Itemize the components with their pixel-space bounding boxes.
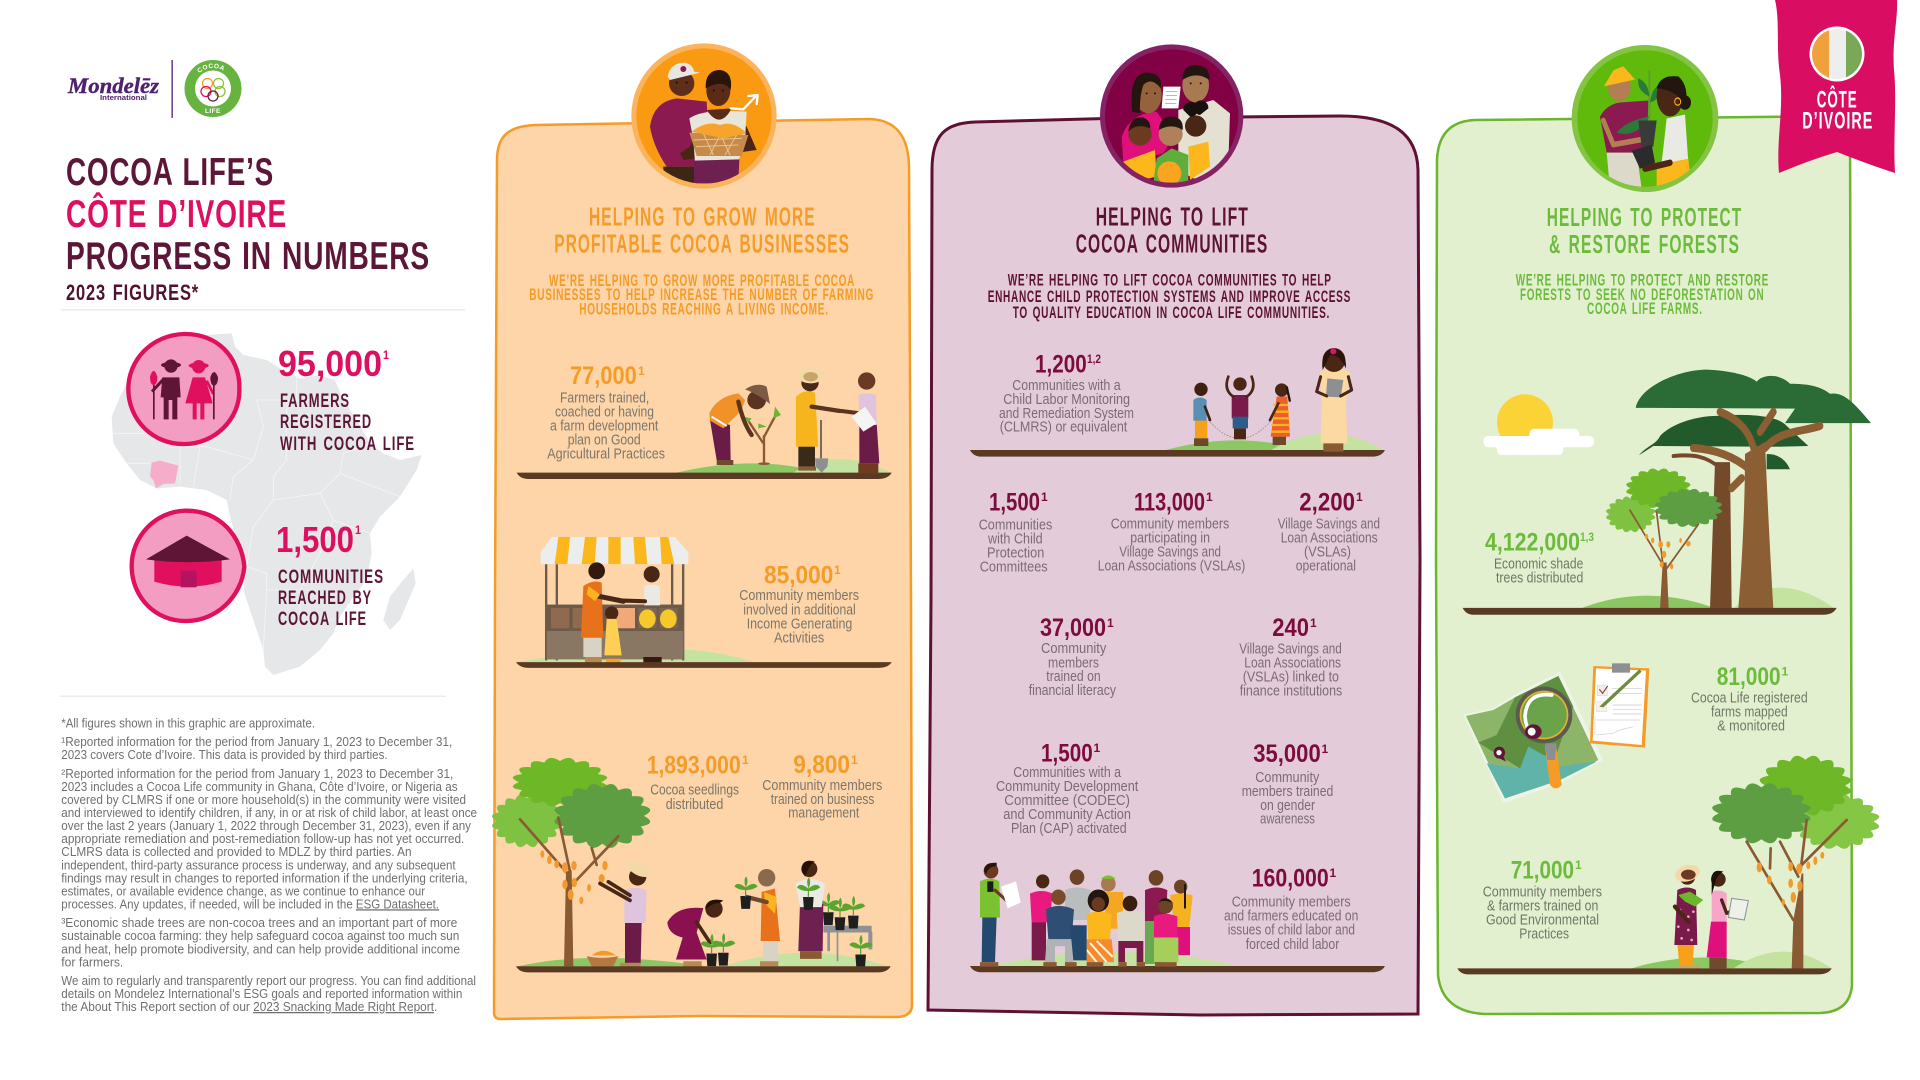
stat: 9,800 — [762, 751, 882, 822]
stat: 240: Village Savings and — [1239, 642, 1342, 658]
stat: 77,000: a farm development — [550, 419, 658, 435]
stat: 1,500 CODEC: 1,500 — [1041, 739, 1093, 767]
footnotes: estimates, or available evidence change, as we continue to enhance our — [61, 883, 426, 898]
stat: 1,500 CODEC: Committee (CODEC) — [1004, 793, 1130, 809]
stat: 113,000: Loan Associations (VSLAs) — [1098, 558, 1245, 574]
footnotes: the About This Report section of our 2023 Snacking Made Right Report. — [61, 999, 437, 1014]
heading: HELPING TO PROTECT — [1547, 204, 1742, 232]
footnotes: over the last 2 years (January 1, 2022 through December 31, 2023), even if any — [61, 818, 472, 833]
stat: 37,000: members — [1048, 655, 1099, 671]
stat: 71,000: Good Environmental — [1486, 913, 1599, 929]
stat: 2,200: 1 — [1356, 490, 1363, 504]
logo: Mondelez wordmark: International — [100, 95, 147, 102]
footnotes — [61, 715, 477, 1014]
logo: Cocoa Life badge: LIFE — [205, 108, 221, 115]
heading: COCOA COMMUNITIES — [1076, 231, 1268, 259]
stat: 1,500 child protection committees — [979, 488, 1052, 575]
stat: 9,800: 9,800 — [793, 751, 850, 779]
stat: 1,200: 1,200 — [1035, 350, 1087, 378]
stat: 2,200: (VSLAs) — [1304, 544, 1351, 560]
stat: 81,000: farms mapped — [1711, 705, 1788, 721]
heading: HELPING TO GROW MORE — [589, 204, 816, 232]
stat: 35,000: 35,000 — [1253, 740, 1321, 768]
icon: male farmer — [150, 359, 181, 419]
title: PROGRESS IN NUMBERS — [66, 235, 430, 278]
stat: 77,000: 77,000 — [570, 362, 637, 390]
illustration: market stall — [516, 537, 892, 668]
stat: 240: (VSLAs) linked to — [1243, 669, 1339, 685]
stat: 160,000: issues of child labor and — [1228, 923, 1355, 939]
stat: 77,000: coached or having — [555, 405, 654, 421]
stat: 1,200: 1,2 — [1087, 352, 1101, 366]
stat: 1,500 CODEC: 1 — [1094, 741, 1100, 755]
footnotes: findings may result in changes to reported information if the underlying criteria, — [61, 870, 468, 885]
title: CÔTE D’IVOIRE — [66, 191, 287, 236]
stat: 95,000 farmers: REGISTERED — [280, 412, 372, 433]
stat: 113,000: Village Savings and — [1119, 544, 1221, 560]
stat: 160,000: Community members — [1232, 895, 1351, 911]
panel: protect and restore forests — [1436, 45, 1879, 1014]
stat: 81,000 — [1691, 663, 1808, 735]
stat: 37,000: 37,000 — [1040, 614, 1106, 642]
intro text: HOUSEHOLDS REACHING A LIVING INCOME. — [579, 300, 829, 318]
stat: 37,000: financial literacy — [1029, 683, 1117, 699]
stat: 1,500 child protection committees: Protection — [987, 545, 1044, 561]
stat: 71,000: 71,000 — [1511, 856, 1574, 884]
stat: 1,893,000: Cocoa seedlings — [650, 783, 739, 799]
stat: 9,800: trained on business — [771, 792, 874, 808]
stat: 240: 1 — [1310, 616, 1317, 630]
footnotes: *All figures shown in this graphic are approximate. — [61, 715, 315, 730]
stat: 95,000 farmers: WITH COCOA LIFE — [280, 434, 415, 455]
stat: 1,200: (CLMRS) or equivalent — [1000, 420, 1127, 436]
stat: 4,122,000: trees distributed — [1496, 571, 1583, 587]
stat: 81,000: 1 — [1782, 664, 1788, 678]
stat: 160,000: 1 — [1330, 866, 1336, 880]
stat: 2,200: Loan Associations — [1281, 531, 1378, 547]
magnifier — [1516, 687, 1572, 788]
stat: 160,000: forced child labor — [1246, 937, 1339, 953]
heading — [1076, 204, 1268, 259]
intro text: BUSINESSES TO HELP INCREASE THE NUMBER OF FARMING — [529, 286, 874, 304]
map: Africa — [112, 333, 422, 675]
stat: 113,000: participating in — [1130, 531, 1210, 547]
stat: 1,500 child protection committees: 1 — [1041, 490, 1048, 504]
heading — [554, 204, 850, 259]
intro text: WE’RE HELPING TO GROW MORE PROFITABLE COCOA — [549, 272, 855, 290]
footnotes: covered by CLMRS if one or more household(s) in the community were visited — [61, 792, 466, 807]
stat: 4,122,000: 4,122,000 — [1485, 528, 1580, 556]
stat: 85,000: Income Generating — [747, 617, 852, 633]
footnotes: ¹Reported information for the period from January 1, 2023 to December 31, — [61, 734, 452, 749]
footnotes: independent, third-party assurance process is underway, and any subsequent — [61, 857, 456, 872]
stat: 71,000 — [1483, 856, 1602, 942]
panel background: orange — [494, 119, 912, 1019]
stat: 9,800: Community members — [762, 778, 882, 794]
stat: 35,000: members trained — [1242, 784, 1333, 800]
stat: 85,000: Activities — [774, 630, 824, 646]
logo: Mondelez wordmark: Mondelēz — [67, 73, 159, 98]
stat: 240: 240 — [1272, 614, 1309, 642]
intro text: TO QUALITY EDUCATION IN COCOA LIFE COMMUNITIES. — [1013, 304, 1330, 322]
icon: house badge — [132, 511, 244, 621]
intro text — [1516, 271, 1769, 318]
title: 2023 FIGURES* — [66, 280, 199, 305]
illustration: two women and cocoa tree — [1457, 756, 1879, 974]
footnotes: and heat, help promote biodiversity, and can help provide additional income — [61, 941, 460, 956]
stat: 95,000 farmers: 95,000 — [278, 343, 382, 384]
stat: 9,800: 1 — [851, 753, 858, 767]
footnotes: processes. Any updates, if needed, will be included in the ESG Datasheet. — [61, 896, 439, 911]
stat: 1,500 CODEC: and Community Action — [1003, 807, 1131, 823]
heading: PROFITABLE COCOA BUSINESSES — [554, 231, 850, 259]
stat: 35,000: Community — [1255, 770, 1320, 786]
panel background: green — [1436, 116, 1852, 1014]
clipboard — [1590, 663, 1649, 748]
banner: Côte d'Ivoire ribbon: CÔTE — [1817, 86, 1858, 114]
stat: 77,000: 1 — [638, 364, 645, 378]
stat: 2,200: operational — [1296, 558, 1356, 574]
stat: 1,200: and Remediation System — [999, 406, 1134, 422]
intro text — [529, 272, 874, 318]
icon: family — [1100, 44, 1243, 188]
stat: 37,000: 1 — [1107, 616, 1114, 630]
stat: 113,000: Community members — [1111, 517, 1229, 533]
stat: 77,000 — [547, 362, 665, 463]
stat: 71,000: & farmers trained on — [1487, 899, 1598, 915]
stat: 1,200 — [999, 350, 1134, 436]
stat: 35,000: awareness — [1260, 812, 1315, 828]
intro text: ENHANCE CHILD PROTECTION SYSTEMS AND IMPROVE ACCESS — [988, 288, 1351, 306]
stat: 1,893,000: 1,893,000 — [647, 752, 741, 780]
intro text: FORESTS TO SEEK NO DEFORESTATION ON — [1520, 286, 1764, 304]
illustration: baobab and cocoa trees — [1463, 370, 1871, 615]
footnotes: ²Reported information for the period from January 1, 2023 to December 31, — [61, 766, 453, 781]
panel background: purple — [928, 116, 1420, 1015]
stat: 240: Loan Associations — [1244, 655, 1341, 671]
icon: farmers badge — [128, 334, 239, 444]
footnotes: appropriate remediation and post-remediation follow-up has not yet occurred. — [61, 831, 464, 846]
stat: 1,200: Child Labor Monitoring — [1003, 392, 1130, 408]
stat: 71,000: Practices — [1519, 926, 1569, 942]
illustration: sun and cloud — [1483, 394, 1594, 455]
stat: 85,000 — [739, 561, 859, 646]
footnotes: CLMRS data is collected and provided to MDLZ by third parties. An — [61, 844, 412, 859]
intro text: WE’RE HELPING TO LIFT COCOA COMMUNITIES TO HELP — [1008, 272, 1332, 290]
stat: 1,500 CODEC: Community Development — [996, 779, 1138, 795]
logo: Cocoa Life badge: COCOA — [198, 64, 224, 72]
illustration: cocoa tree and seedlings — [492, 758, 891, 972]
footnotes: We aim to regularly and transparently report our progress. You can find additional — [61, 973, 476, 988]
heading — [1547, 204, 1742, 259]
stat: 9,800: management — [788, 806, 859, 822]
panel: profitable cocoa businesses — [492, 43, 912, 1019]
stat: 1,500 communities: COCOA LIFE — [278, 609, 367, 630]
map — [1463, 672, 1603, 803]
stat: 85,000: 1 — [834, 563, 841, 577]
stat: 95,000 farmers — [278, 343, 415, 455]
stat: 77,000: Agricultural Practices — [547, 447, 665, 463]
stat: 81,000: & monitored — [1717, 719, 1785, 735]
stat: 95,000 farmers: 1 — [383, 348, 389, 362]
illustration: farmers planting and shaking hands — [517, 369, 892, 479]
stat: 37,000: trained on — [1046, 669, 1101, 685]
heading: & RESTORE FORESTS — [1549, 231, 1740, 259]
footnotes: and interviewed to identify children, if any, in or at risk of child labor, at least once — [61, 805, 477, 820]
stat: 240: finance institutions — [1240, 683, 1342, 699]
stat: 35,000 — [1242, 740, 1333, 828]
stat: 37,000: Community — [1041, 641, 1107, 657]
stat: 71,000: 1 — [1575, 858, 1582, 872]
stat: 85,000: 85,000 — [764, 561, 833, 589]
stat: 35,000: 1 — [1322, 742, 1328, 756]
stat: 2,200: Village Savings and — [1278, 517, 1380, 533]
stat: 4,122,000: Economic shade — [1494, 556, 1583, 572]
footnotes: 2023 includes a Cocoa Life community in Ghana, Côte d’Ivoire, or Nigeria as — [61, 779, 458, 794]
stat: 1,500 communities — [276, 519, 384, 630]
icon: farmers with cocoa basket — [631, 43, 777, 189]
stat: 85,000: Community members — [739, 588, 859, 604]
stat: 81,000: 81,000 — [1717, 663, 1781, 691]
stat: 1,500 communities: COMMUNITIES — [278, 567, 384, 588]
stat: 1,500 CODEC: Communities with a — [1013, 765, 1122, 781]
stat: 113,000 — [1098, 488, 1245, 574]
stat: 77,000: plan on Good — [568, 433, 641, 449]
stat: 113,000: 113,000 — [1134, 488, 1205, 516]
panel: cocoa communities — [928, 44, 1420, 1015]
illustration: map, magnifier and clipboard — [1463, 663, 1649, 803]
stat: 2,200 — [1278, 488, 1380, 574]
footnotes: 2023 covers Cote d’Ivoire. This data is provided by third parties. — [61, 747, 388, 762]
icon: Ivorian flag — [1810, 26, 1864, 82]
stat: 1,500 communities: REACHED BY — [278, 588, 372, 609]
stat: 1,500 child protection committees: 1,500 — [989, 488, 1040, 516]
stat: 1,500 child protection committees: Communities — [979, 517, 1052, 533]
intro text: COCOA LIFE FARMS. — [1587, 300, 1703, 318]
stat: 160,000: and farmers educated on — [1224, 909, 1358, 925]
stat: 1,200: Communities with a — [1012, 378, 1122, 394]
illustration: community group meeting — [970, 863, 1385, 972]
stat: 1,500 CODEC: Plan (CAP) activated — [1011, 821, 1127, 837]
stat: 1,500 communities: 1 — [355, 523, 361, 537]
footnotes: ³Economic shade trees are non-cocoa trees and an important part of more — [61, 915, 457, 930]
stat: 71,000: Community members — [1483, 885, 1602, 901]
title: COCOA LIFE’S — [66, 151, 274, 194]
stat: 1,500 child protection committees: with Child — [987, 531, 1043, 547]
stat: 2,200: 2,200 — [1299, 488, 1355, 516]
stat: 77,000: Farmers trained, — [560, 391, 649, 407]
stat: 160,000 — [1224, 865, 1358, 953]
heading: HELPING TO LIFT — [1096, 204, 1249, 232]
illustration: children playing with teacher — [970, 348, 1385, 457]
title — [66, 151, 430, 305]
stat: 1,893,000 — [647, 752, 749, 813]
intro text — [988, 272, 1351, 322]
banner: Côte d'Ivoire ribbon: D’IVOIRE — [1802, 108, 1873, 135]
stat: 95,000 farmers: FARMERS — [280, 391, 350, 412]
stat: 4,122,000: 1,3 — [1580, 530, 1594, 544]
stat: 1,893,000: 1 — [742, 753, 749, 767]
icon: female farmer — [185, 360, 218, 419]
stat: 37,000 — [1029, 614, 1117, 699]
footnotes: sustainable cocoa farming: they help safeguard cocoa against too much sun — [61, 928, 459, 943]
stat: 1,500 communities: 1,500 — [276, 519, 354, 560]
icon: planting together — [1572, 45, 1718, 192]
stat: 35,000: on gender — [1260, 798, 1315, 814]
stat: 1,893,000: distributed — [666, 797, 723, 813]
logo: Mondelez International and Cocoa Life — [67, 60, 242, 118]
footnotes: for farmers. — [61, 954, 123, 969]
stat: 81,000: Cocoa Life registered — [1691, 691, 1808, 707]
stat: 160,000: 160,000 — [1252, 865, 1329, 893]
stat: 4,122,000 — [1485, 528, 1594, 587]
stat: 85,000: involved in additional — [743, 602, 856, 618]
stat: 113,000: 1 — [1206, 490, 1213, 504]
footnotes: details on Mondelez International’s ESG goals and reported information within — [61, 986, 462, 1001]
stat: 1,500 CODEC — [996, 739, 1138, 837]
stat: 1,500 child protection committees: Committees — [980, 559, 1048, 575]
stat: 240 — [1239, 614, 1342, 699]
logo: Cocoa Life badge — [184, 60, 242, 117]
banner: Côte d'Ivoire ribbon — [1775, 0, 1897, 173]
